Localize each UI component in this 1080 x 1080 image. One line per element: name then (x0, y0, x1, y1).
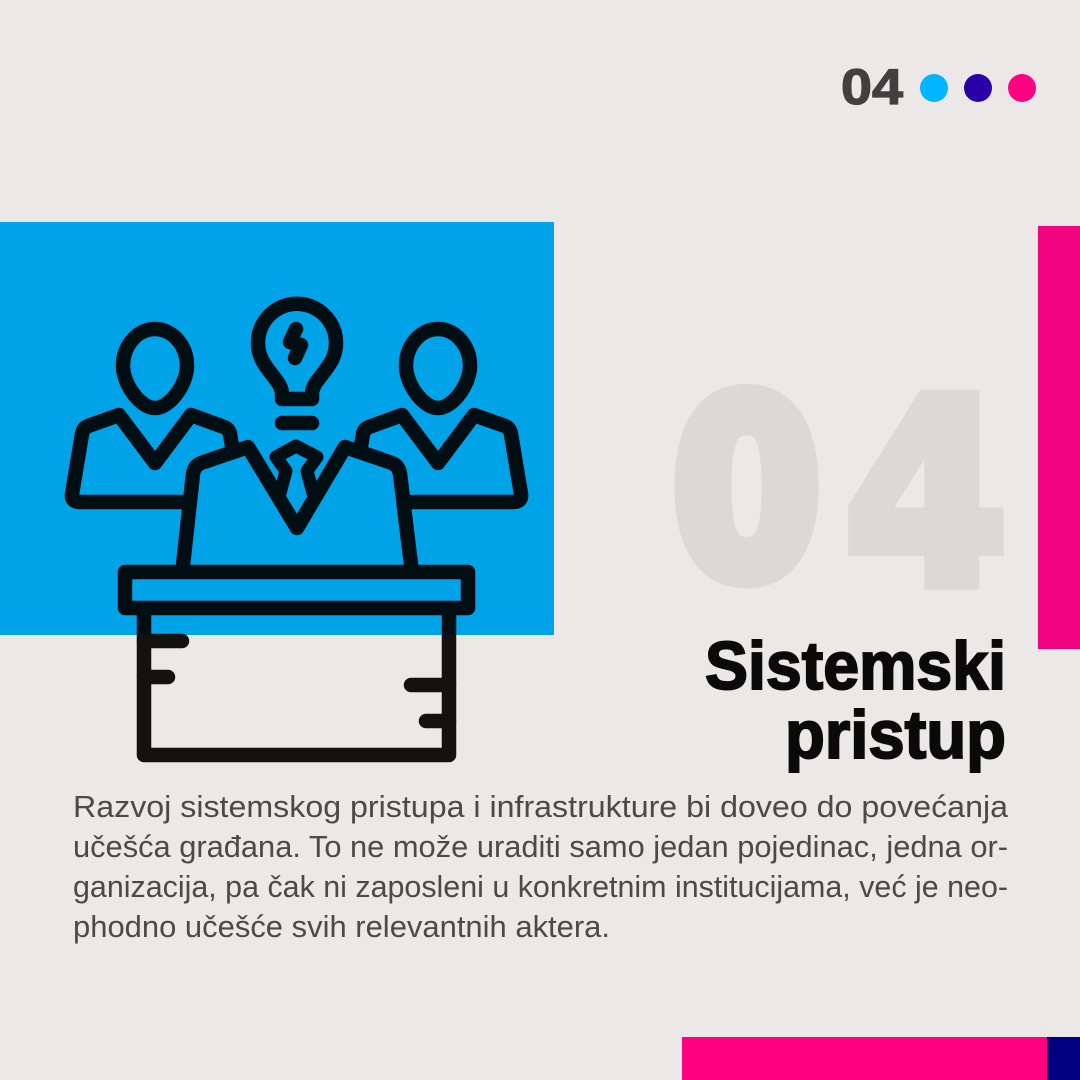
body text (73, 789, 1009, 944)
page number: 04 (841, 59, 903, 115)
panel: blue block (0, 222, 554, 635)
icon: team at a desk with a light bulb (72, 304, 521, 755)
pagination dots (920, 74, 1036, 102)
right person (360, 329, 521, 502)
body text: učešća građana. To ne može uraditi samo jedan pojedinac, jedna or- (73, 829, 1008, 864)
bottom bar: navy (1047, 1037, 1080, 1080)
heading: pristup (785, 697, 1006, 773)
body text: Razvoj sistemskog pristupa i infrastrukture bi doveo do povećanja (73, 789, 1009, 824)
desk (125, 572, 468, 755)
body text: ganizacija, pa čak ni zaposleni u konkretnim institucijama, već je neo- (73, 869, 1008, 904)
body text: phodno učešće svih relevantnih aktera. (73, 909, 610, 944)
bottom bar: pink (682, 1037, 1047, 1080)
pink side bar (1038, 226, 1080, 649)
heading (705, 628, 1006, 773)
centre person (183, 446, 411, 565)
large watermark number: 4 (844, 347, 1008, 644)
light bulb (258, 304, 336, 423)
heading: Sistemski (705, 628, 1006, 704)
large watermark number: 0 (673, 349, 820, 633)
left person (72, 329, 233, 502)
large watermark number (673, 347, 1008, 644)
